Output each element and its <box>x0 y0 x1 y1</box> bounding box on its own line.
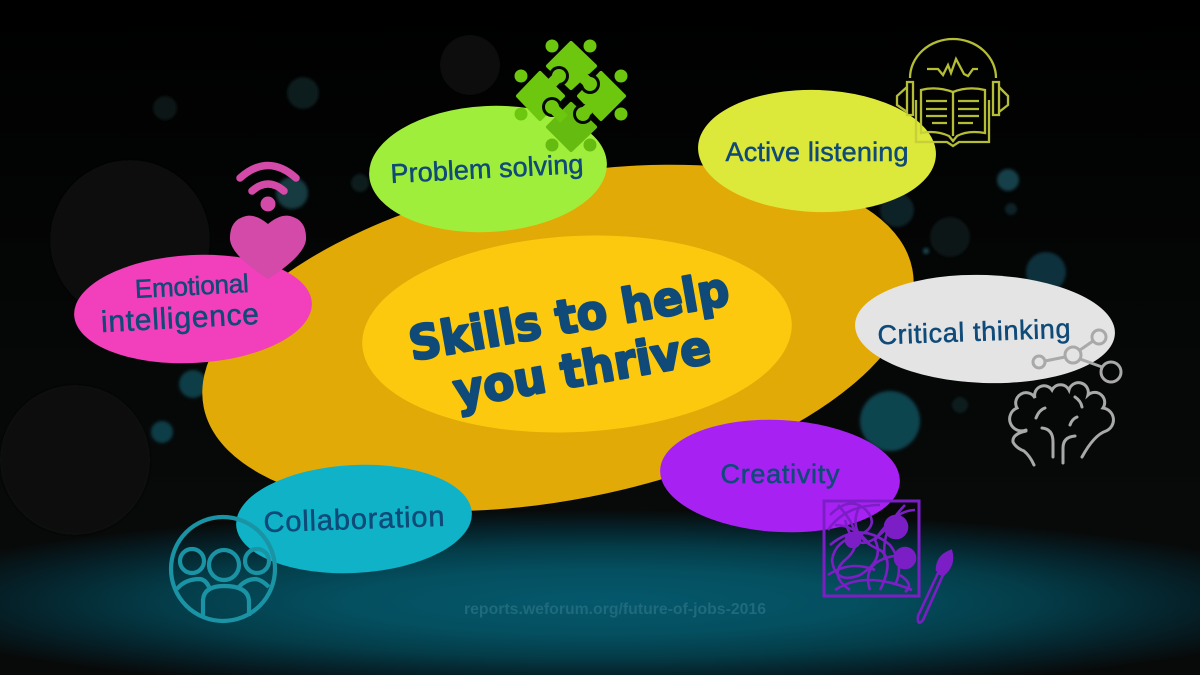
pill: collaboration: Collaboration <box>263 501 445 539</box>
pill: collaboration <box>233 459 475 579</box>
pill: problem solving <box>366 100 610 238</box>
icon: brain network <box>1010 330 1121 465</box>
pill: critical thinking <box>853 270 1117 388</box>
pill: active listening <box>696 86 938 216</box>
icon: puzzle pieces <box>514 40 628 152</box>
icon: palette and brush <box>824 501 952 623</box>
icon: heart with wifi <box>230 166 306 279</box>
source link: reports.weforum.org/future-of-jobs-2016 <box>464 601 766 618</box>
title: Skills to help <box>405 262 733 372</box>
icon: people in circle <box>171 517 275 621</box>
title <box>405 262 743 426</box>
pill: emotional intelligence: Emotional <box>134 268 249 304</box>
icon: headphones and book <box>897 39 1008 146</box>
pill: creativity: Creativity <box>720 459 840 489</box>
pill: emotional intelligence <box>71 249 315 369</box>
pill: emotional intelligence: intelligence <box>100 298 260 339</box>
title: you thrive <box>449 320 715 419</box>
inner title ellipse <box>357 225 797 443</box>
pill: active listening: Active listening <box>726 137 908 167</box>
pill: problem solving: Problem solving <box>390 149 584 189</box>
large outer ellipse <box>173 110 943 566</box>
pill: critical thinking: Critical thinking <box>877 314 1071 350</box>
pill: creativity <box>657 414 903 538</box>
